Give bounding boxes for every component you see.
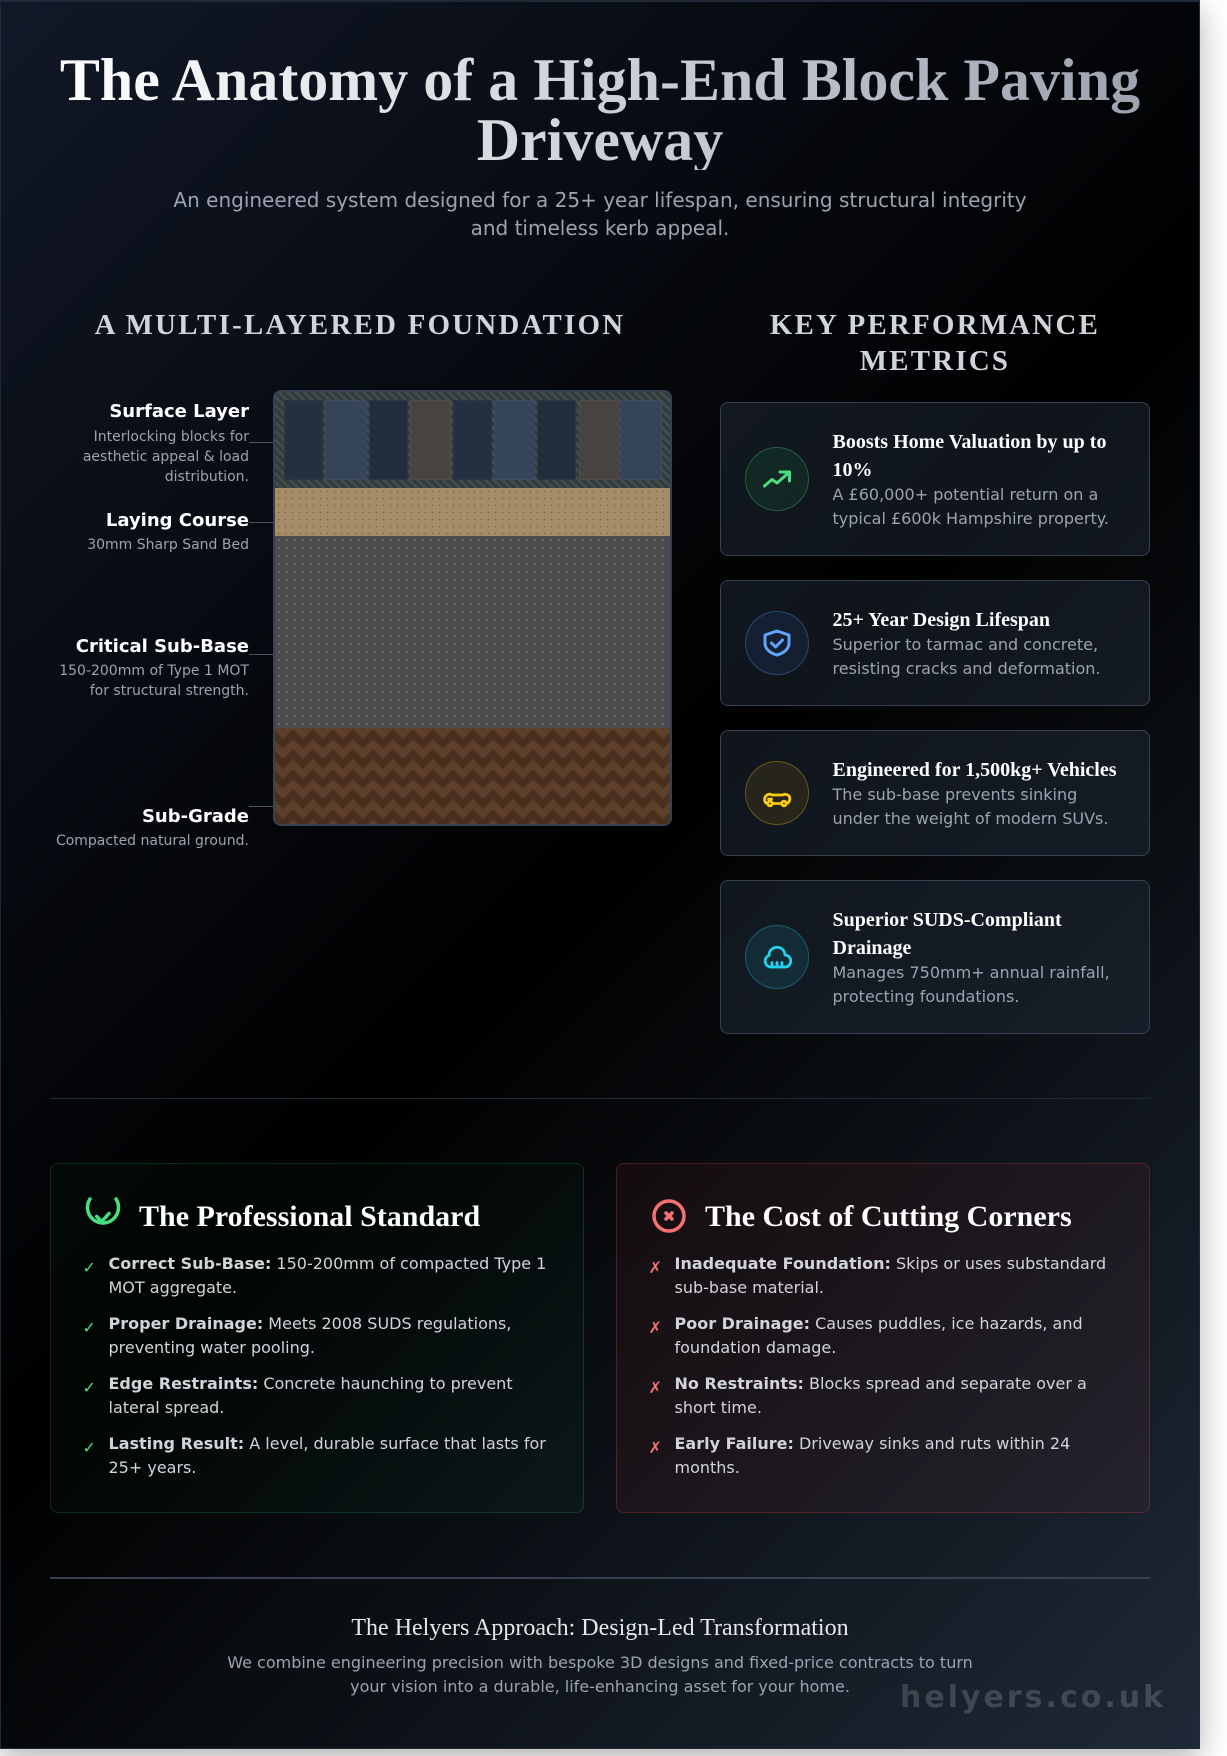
list item: Inadequate Foundation: Skips or uses substandard (674, 1254, 1106, 1273)
heading: foundation: A MULTI-LAYERED FOUNDATION (95, 309, 625, 341)
subtitle: An engineered system designed for a 25+ year lifespan, ensuring structural integrity (173, 188, 1027, 212)
layer: sub-base (275, 536, 670, 728)
text: valuation: typical £600k Hampshire property. (832, 509, 1109, 528)
text: lifespan: resisting cracks and deformation. (832, 659, 1100, 678)
text: vehicles: The sub-base prevents sinking (832, 785, 1077, 804)
subtitle: and timeless kerb appeal. (471, 216, 729, 240)
layer: sub-grade (275, 728, 670, 824)
label: surface layer: Surface Layer (109, 401, 249, 422)
label: critical sub-base (59, 636, 250, 699)
text: lifespan: 25+ Year Design Lifespan (832, 609, 1050, 631)
text: valuation (832, 431, 1109, 528)
panel: cost of cutting corners: ✗ (648, 1258, 662, 1277)
list item (82, 1254, 546, 1297)
list item: foundation damage. (674, 1338, 836, 1357)
cross-section diagram (273, 390, 672, 826)
list item: Lasting Result: A level, durable surface that lasts for (108, 1434, 546, 1453)
layer: surface blocks (275, 392, 670, 488)
metric card: valuation (720, 402, 1150, 556)
label: surface layer (83, 401, 249, 485)
label: surface layer: aesthetic appeal & load (83, 449, 249, 465)
list item (648, 1314, 1083, 1357)
list item: No Restraints: Blocks spread and separate over a (674, 1374, 1087, 1393)
text: drainage: Superior SUDS-Compliant (832, 909, 1062, 931)
heading: metrics: KEY PERFORMANCE (770, 309, 1100, 341)
label: sub-grade (56, 806, 249, 849)
list item (82, 1434, 546, 1477)
title: Driveway (477, 107, 723, 173)
icon: trending up (745, 447, 809, 511)
icon: cloud rain (745, 925, 809, 989)
label: laying course: 30mm Sharp Sand Bed (87, 537, 249, 553)
text: vehicles (832, 759, 1117, 828)
footer heading: The Helyers Approach: Design-Led Transformation (351, 1615, 849, 1641)
list item: lateral spread. (108, 1398, 224, 1417)
list item: Poor Drainage: Causes puddles, ice hazards, and (674, 1314, 1083, 1333)
list item (648, 1254, 1106, 1297)
label: surface layer: Interlocking blocks for (94, 429, 249, 445)
panel: professional standard: ✓ (82, 1438, 96, 1457)
panel: cost of cutting corners: ✗ (648, 1378, 662, 1397)
panel: professional standard: ✓ (82, 1378, 96, 1397)
text: drainage: protecting foundations. (832, 987, 1019, 1006)
text: drainage: Manages 750mm+ annual rainfall, (832, 963, 1110, 982)
footer text (227, 1653, 973, 1696)
heading: The Professional Standard (139, 1200, 480, 1233)
list item: short time. (674, 1398, 762, 1417)
text: lifespan (832, 609, 1100, 678)
footer text: your vision into a durable, life-enhancing asset for your home. (350, 1677, 850, 1696)
list item: 25+ years. (108, 1458, 196, 1477)
panel: professional standard: ✓ (82, 1318, 96, 1337)
list item: months. (674, 1458, 740, 1477)
icon: x circle (652, 1199, 686, 1233)
label: sub-grade: Sub-Grade (142, 806, 249, 827)
metric card: vehicles (720, 730, 1150, 856)
layer: sand (275, 488, 670, 536)
panel: cost of cutting corners (616, 1163, 1150, 1513)
icon: car (745, 761, 809, 825)
label: critical sub-base: for structural strength. (90, 683, 249, 699)
text: vehicles: under the weight of modern SUVs. (832, 809, 1108, 828)
list item (648, 1434, 1070, 1477)
panel: cost of cutting corners: ✗ (648, 1318, 662, 1337)
list item: sub-base material. (674, 1278, 824, 1297)
heading: metrics (770, 309, 1100, 377)
metric card: drainage (720, 880, 1150, 1034)
label: critical sub-base: Critical Sub-Base (76, 636, 249, 657)
label: laying course (87, 510, 249, 553)
heading: The Cost of Cutting Corners (705, 1200, 1072, 1233)
text: valuation: 10% (832, 459, 872, 481)
label: surface layer: distribution. (165, 469, 249, 485)
text: lifespan: Superior to tarmac and concrete, (832, 635, 1098, 654)
label: critical sub-base: 150-200mm of Type 1 MOT (59, 663, 249, 679)
icon: check circle (86, 1197, 120, 1225)
list item: Proper Drainage: Meets 2008 SUDS regulations, (108, 1314, 511, 1333)
list item: Early Failure: Driveway sinks and ruts within 24 (674, 1434, 1070, 1453)
watermark: helyers.co.uk (900, 1680, 1166, 1715)
panel: professional standard: ✓ (82, 1258, 96, 1277)
icon: shield (745, 611, 809, 675)
text: vehicles: Engineered for 1,500kg+ Vehicles (832, 759, 1117, 781)
text: valuation: Boosts Home Valuation by up to (832, 431, 1106, 453)
footer text: We combine engineering precision with bespoke 3D designs and fixed-price contracts to turn (227, 1653, 973, 1672)
list item: Edge Restraints: Concrete haunching to prevent (108, 1374, 513, 1393)
list item (648, 1374, 1087, 1417)
label: laying course: Laying Course (106, 510, 249, 531)
text: drainage: Drainage (832, 937, 911, 959)
text: drainage (832, 909, 1110, 1006)
title (50, 50, 1150, 170)
list item (82, 1314, 511, 1357)
metric card: lifespan (720, 580, 1150, 706)
subtitle (173, 188, 1027, 240)
panel: cost of cutting corners: ✗ (648, 1438, 662, 1457)
list item: MOT aggregate. (108, 1278, 237, 1297)
list item: preventing water pooling. (108, 1338, 315, 1357)
label: sub-grade: Compacted natural ground. (56, 833, 249, 849)
title: The Anatomy of a High-End Block Paving (60, 47, 1140, 113)
list item (82, 1374, 513, 1417)
panel: professional standard (50, 1163, 584, 1513)
text: valuation: A £60,000+ potential return on a (832, 485, 1098, 504)
heading: metrics: METRICS (860, 345, 1010, 377)
list item: Correct Sub-Base: 150-200mm of compacted Type 1 (108, 1254, 546, 1273)
